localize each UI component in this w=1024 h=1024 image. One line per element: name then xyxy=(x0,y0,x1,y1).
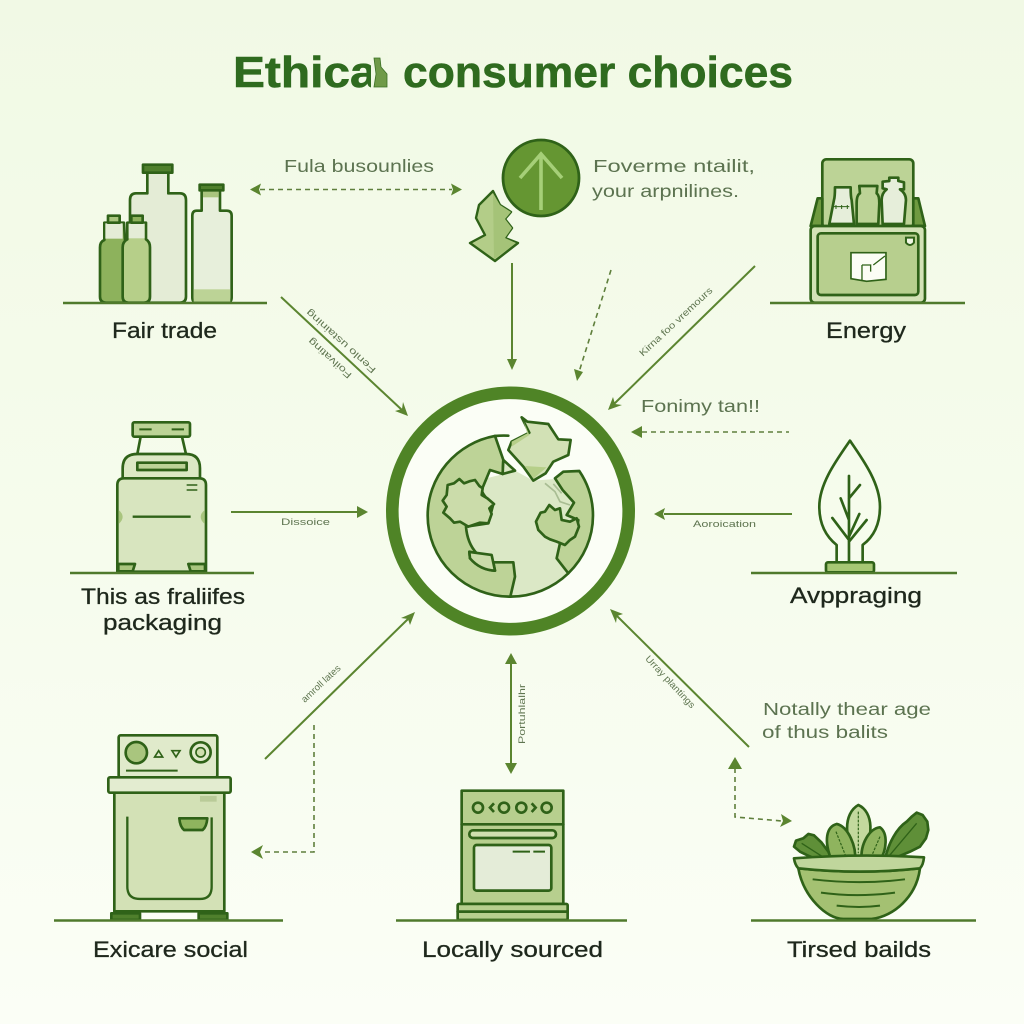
arrow: dashed to washer xyxy=(251,725,314,859)
arrow: bowl to globe xyxy=(610,609,749,747)
shelf line xyxy=(751,919,976,922)
label: avppraging: Avppraging xyxy=(790,583,922,608)
callout: notally note: Notally thear age xyxy=(763,699,931,719)
icon: washer xyxy=(108,735,231,920)
icon: up arrow circle xyxy=(503,140,579,216)
arrow: packaging to globe xyxy=(231,506,368,528)
callout: top right note: your arpnilines. xyxy=(592,181,739,201)
panel: avppraging plant xyxy=(751,441,957,608)
shelf line xyxy=(770,302,965,304)
label: energy: Energy xyxy=(826,318,906,343)
title xyxy=(233,48,793,97)
icon: machine xyxy=(117,422,206,572)
callout: notally note: of thus balits xyxy=(762,722,888,742)
arrow: energy to globe: Kirna foo vremours xyxy=(637,285,715,359)
label: fair trade: Fair trade xyxy=(112,318,217,343)
callout: fonimy note with dashed arrow xyxy=(631,396,789,438)
panel: central globe xyxy=(392,393,629,629)
callout: notally note xyxy=(762,699,931,742)
callout: top left note: Fula busounlies xyxy=(284,156,434,176)
panel: fair trade bottles xyxy=(63,165,267,343)
icon: globe xyxy=(428,417,593,597)
panel: packaging machine xyxy=(70,422,254,635)
arrow: washer to globe xyxy=(265,612,415,759)
arrow: stove to globe double xyxy=(505,653,528,774)
arrow: fair trade to globe: Foilvating xyxy=(306,335,354,380)
icon: bowl with leaves xyxy=(794,805,928,919)
callout: top right note xyxy=(592,156,755,201)
icon: leaf xyxy=(470,191,518,261)
panel: stove xyxy=(396,791,627,962)
arrow: washer to globe: amroll lates xyxy=(299,663,344,705)
icon: stove xyxy=(458,791,568,920)
label: packaging xyxy=(81,584,245,635)
arrow: leaf to globe xyxy=(507,263,517,370)
arrow: plant to globe xyxy=(654,508,792,530)
panel: energy crate xyxy=(770,159,965,343)
arrow: packaging to globe: Dissoice xyxy=(281,517,330,528)
label: exicare social: Exicare social xyxy=(93,937,248,962)
icon: crate with bottles xyxy=(811,159,925,303)
arrow: fair trade to globe: Fenlo ustaining xyxy=(304,307,378,375)
arrow: energy to globe xyxy=(608,266,755,410)
arrow: stove to globe double: Portuhlalhr xyxy=(517,684,528,744)
title: Ethical xyxy=(233,48,390,97)
icon: bottles xyxy=(100,165,232,303)
title: consumer choices xyxy=(403,48,793,97)
shelf line xyxy=(751,572,957,574)
arrow: dashed bent to bowl xyxy=(728,757,792,827)
panel: salad bowl xyxy=(751,805,976,962)
label: tirsed bailds: Tirsed bailds xyxy=(787,937,931,962)
callout: top left note xyxy=(250,156,462,196)
shelf line xyxy=(396,919,627,922)
label: packaging: packaging xyxy=(103,610,222,635)
arrow: fair trade to globe xyxy=(281,297,408,416)
label: locally sourced: Locally sourced xyxy=(422,937,603,962)
callout: top right note: Foverme ntailit, xyxy=(593,156,755,176)
panel: washer xyxy=(54,735,283,962)
shelf line xyxy=(54,919,283,922)
ring xyxy=(392,393,629,629)
shelf line xyxy=(63,302,267,304)
arrow: plant to globe: Aoroication xyxy=(693,519,756,530)
arrow: dashed to globe xyxy=(574,270,611,381)
callout: fonimy note with dashed arrow: Fonimy tan!! xyxy=(641,396,760,416)
arrow: bowl to globe: Urray plantings xyxy=(643,654,697,711)
icon: plant xyxy=(819,441,880,572)
label: packaging: This as fraliifes xyxy=(81,584,245,609)
shelf line xyxy=(70,572,254,574)
